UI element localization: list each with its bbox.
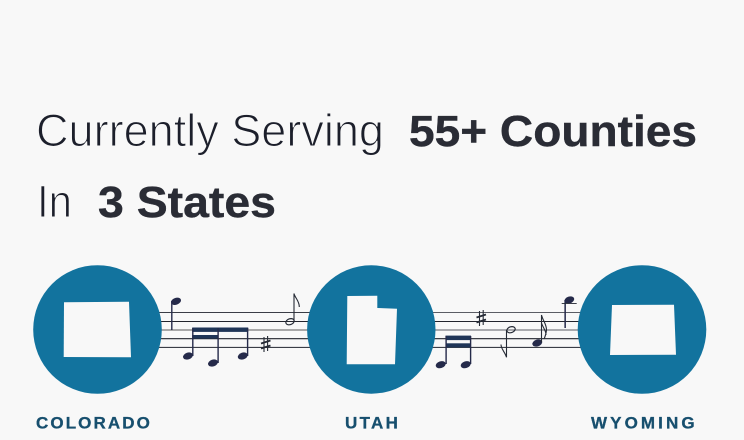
quarter note with ledger line	[562, 295, 577, 328]
label: Utah: UTAH	[345, 413, 400, 432]
beamed sixteenth and eighth notes	[182, 328, 249, 368]
music notes: Utah to Wyoming	[435, 295, 577, 370]
title line 2: bold text: 3 States	[98, 178, 276, 227]
title line 2: light text: In	[37, 176, 72, 227]
Utah circle	[307, 265, 435, 394]
sharp sign	[476, 310, 486, 326]
label: Wyoming: WYOMING	[591, 413, 698, 432]
icon: Wyoming state shape	[610, 305, 676, 355]
icon: Utah state shape	[347, 296, 397, 364]
staff: Colorado to Utah	[158, 312, 312, 347]
beamed sixteenth notes	[435, 336, 472, 370]
inverted eighth note with open head	[501, 326, 516, 357]
sixteenth note	[531, 315, 546, 348]
quarter note	[170, 296, 182, 330]
staff: Utah to Wyoming	[428, 312, 582, 347]
icon: Colorado state shape	[64, 302, 131, 357]
title line 1: light text: Currently Serving	[36, 105, 384, 156]
Wyoming circle	[578, 265, 706, 394]
music notes: Colorado to Utah	[170, 294, 299, 368]
label: Colorado: COLORADO	[36, 413, 152, 432]
Colorado circle	[33, 265, 162, 394]
eighth note with open head	[285, 294, 299, 326]
title	[36, 105, 697, 227]
sharp sign	[261, 336, 270, 352]
title line 1: bold text: 55+ Counties	[409, 107, 697, 156]
